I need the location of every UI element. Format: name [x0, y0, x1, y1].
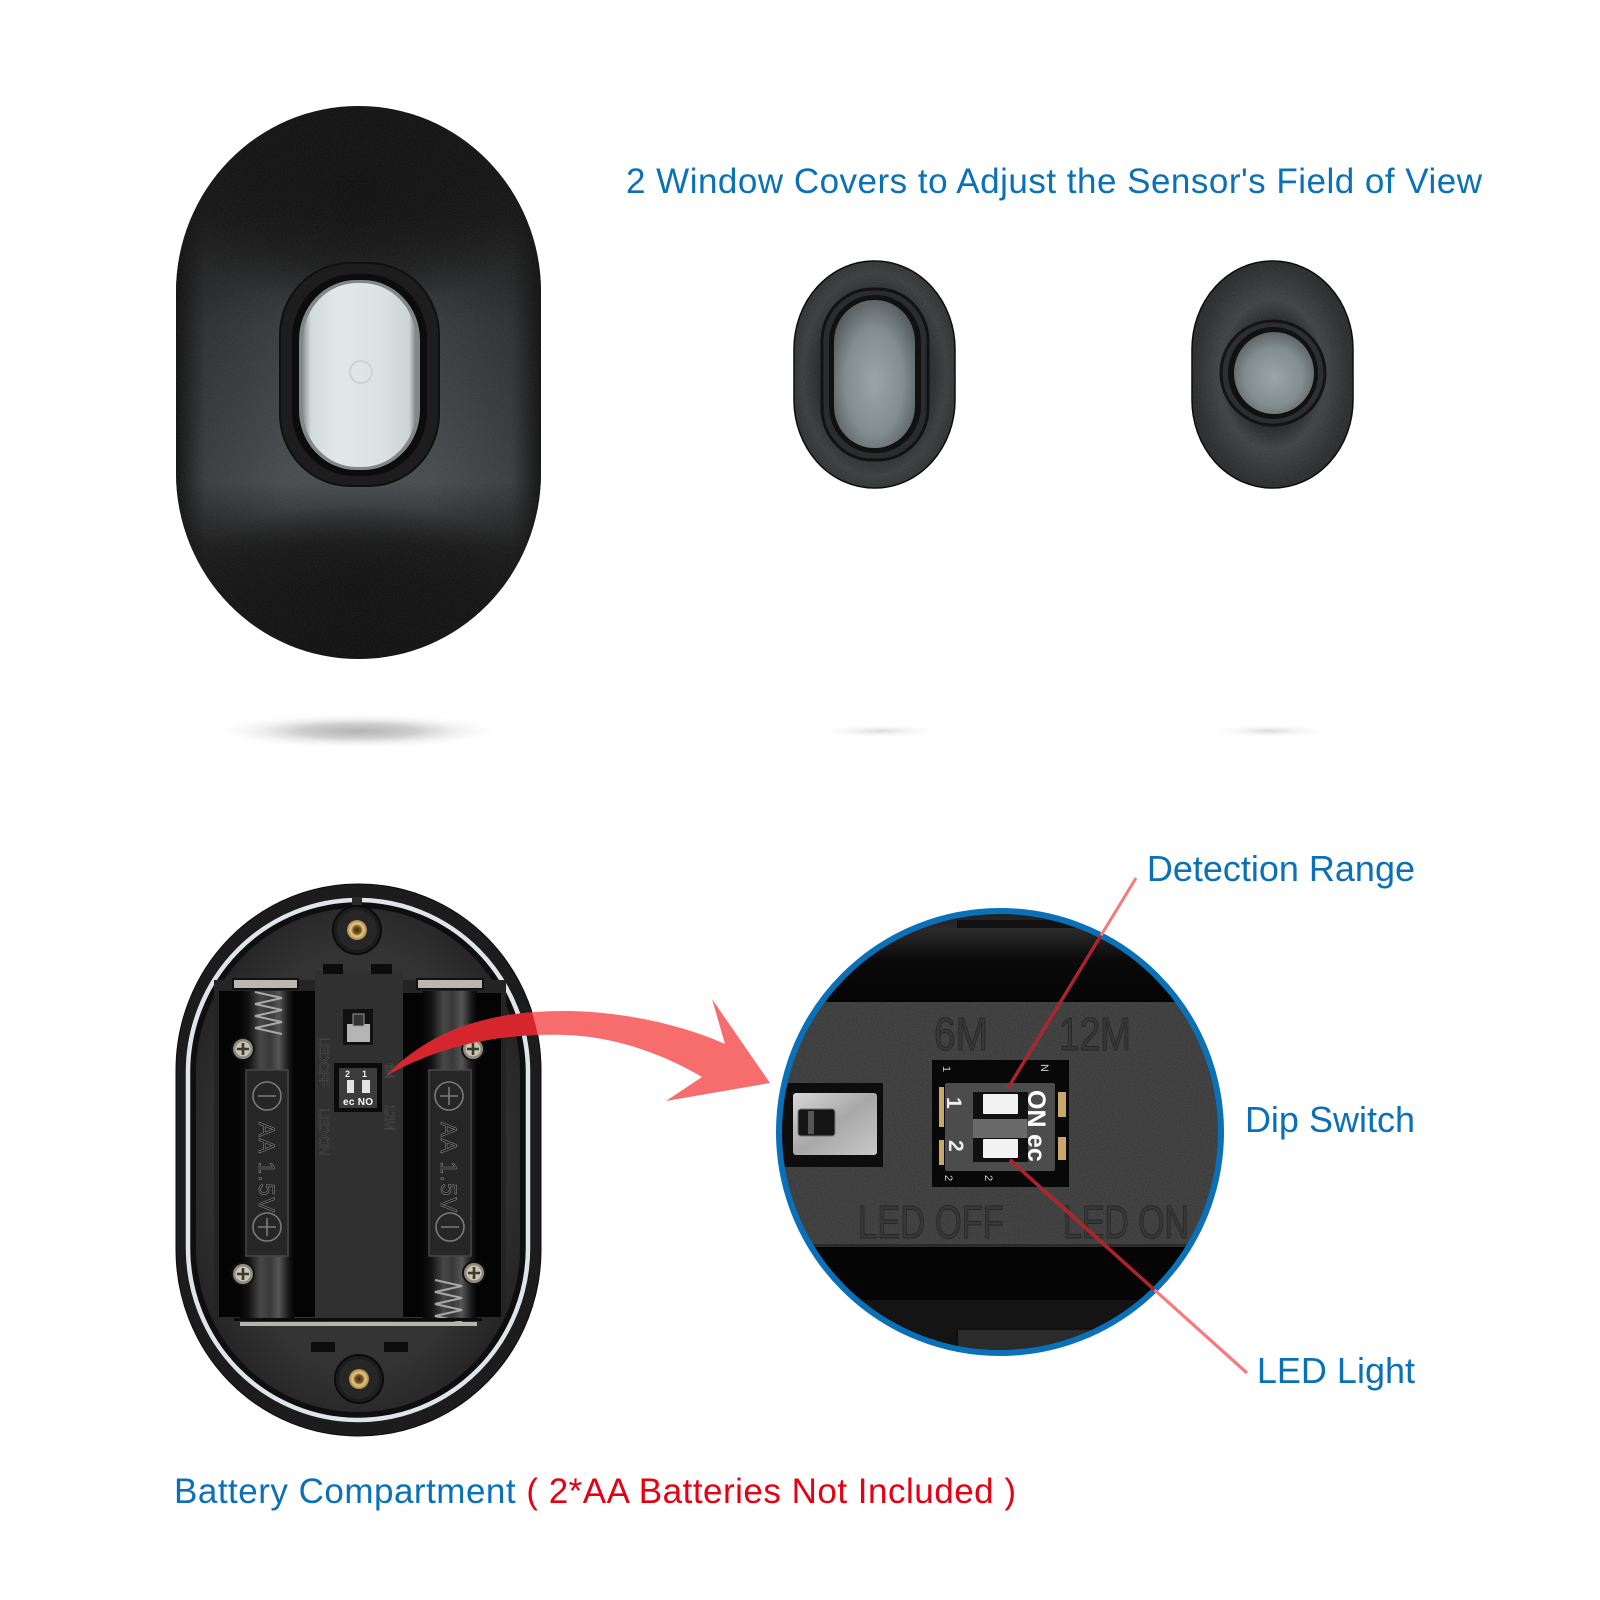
bottom contact rail — [240, 1322, 477, 1326]
upper bay — [825, 914, 1175, 1002]
dip switch: 1 — [942, 1097, 965, 1109]
gray band — [770, 1002, 1230, 1247]
shadow: wide cover — [815, 724, 945, 738]
dip switch: ON — [1022, 1090, 1050, 1128]
window cover: narrow field — [1192, 261, 1353, 488]
leader line: detection range — [1008, 878, 1136, 1088]
small dip switch: ec NO — [343, 1097, 373, 1108]
product: main sensor front view — [176, 106, 541, 659]
right battery bay — [403, 979, 506, 1322]
molded labels — [315, 1037, 398, 1156]
dip switch: 1 — [940, 1066, 952, 1072]
magnified view: dip switch — [770, 905, 1230, 1360]
label: LED light: LED Light — [1257, 1350, 1415, 1391]
slide switch — [782, 1083, 883, 1167]
molded text: LED ON — [1063, 1196, 1189, 1248]
molded text: 12M — [1059, 1008, 1131, 1060]
molded text: 6M — [934, 1008, 988, 1060]
small dip switch: 1 — [362, 1069, 367, 1079]
left battery bay — [214, 979, 315, 1319]
lower bay — [814, 1247, 1186, 1300]
dip switch: 2 — [982, 1175, 994, 1181]
dip switch: ec — [1022, 1134, 1050, 1162]
slots — [311, 964, 408, 1352]
dip switch: N — [1038, 1064, 1050, 1072]
left battery bay: AA 1.5V — [254, 1122, 279, 1212]
molded labels: LED OFF — [315, 1037, 332, 1087]
label: dip switch: Dip Switch — [1245, 1099, 1415, 1140]
outer housing — [176, 884, 541, 1436]
dip switch: 2 — [942, 1175, 954, 1181]
magnifier border — [779, 911, 1221, 1353]
small dip switch — [334, 1063, 382, 1112]
screws — [232, 1038, 254, 1060]
shadow: narrow cover — [1205, 724, 1335, 738]
dip switch: 2 — [944, 1140, 967, 1152]
molded labels: 12M — [381, 1104, 398, 1131]
title: window covers: 2 Window Covers to Adjust the Sensor's Field of View — [626, 162, 1483, 201]
dip switch — [932, 1060, 1069, 1187]
product: battery compartment back view — [176, 884, 541, 1436]
label: detection range: Detection Range — [1147, 848, 1415, 889]
molded text — [858, 1008, 1189, 1248]
small dip switch: 2 — [345, 1069, 350, 1079]
mounting holes — [333, 906, 381, 954]
arrow: battery compartment to magnified view — [386, 999, 770, 1101]
center column — [315, 970, 403, 1320]
window cover: wide field — [794, 261, 955, 488]
white gasket ring — [188, 900, 528, 1420]
small slide switch — [343, 1009, 373, 1045]
inner plate — [196, 908, 520, 1412]
molded labels: 6M — [381, 1063, 398, 1079]
right battery bay: AA 1.5V — [436, 1122, 461, 1212]
molded text: LED OFF — [858, 1196, 1004, 1248]
leader line: LED light — [1010, 1160, 1247, 1373]
caption: battery compartment: Battery Compartment ( 2*AA Batteries Not Included ) — [174, 1472, 1016, 1511]
shadow: main sensor — [208, 713, 508, 749]
molded labels: LED ON — [315, 1108, 332, 1156]
